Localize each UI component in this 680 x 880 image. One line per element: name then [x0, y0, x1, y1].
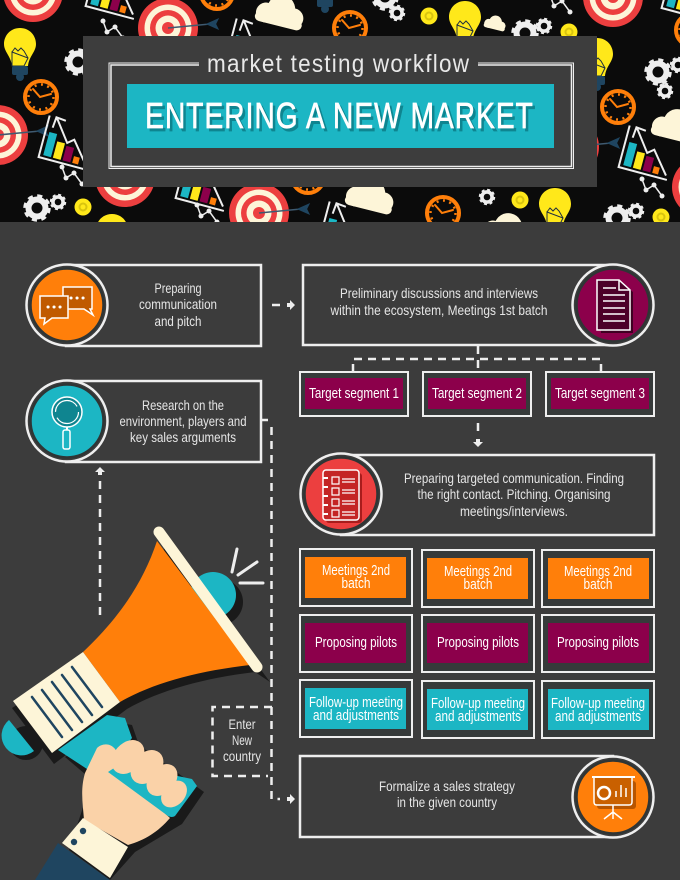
card: pilots column 2: Proposing pilots: [437, 635, 519, 651]
card: meetings column 3: batch: [584, 577, 612, 593]
step: preliminary discussions: [303, 264, 654, 346]
step text: communication: [139, 296, 217, 312]
title panel: [83, 36, 597, 187]
title bar: ENTERING A NEW MARKET: [148, 99, 535, 139]
card: meetings column 2: batch: [464, 577, 492, 593]
box text: Enter: [228, 716, 256, 732]
card: follow-up column 1: [300, 680, 412, 737]
step: preparing targeted communication: [300, 454, 654, 535]
step text: Preparing: [154, 280, 202, 296]
box text: [223, 716, 261, 764]
drop shadow: [9, 541, 270, 880]
target segment 1: Target segment 1: [309, 386, 399, 402]
icon pattern background: [0, 0, 680, 222]
step text: environment, players and: [120, 413, 246, 429]
icon: document: [597, 280, 633, 333]
back bell: [190, 572, 236, 618]
orange horn: [83, 541, 250, 702]
teal handle: [58, 715, 132, 778]
card: meetings column 3: Meetings 2nd: [564, 564, 632, 580]
sound lines: [232, 549, 263, 583]
step text: the right contact. Pitching. Organising: [418, 486, 610, 502]
hand palm and thumb: [82, 744, 170, 845]
card: follow-up column 3: [542, 681, 654, 738]
arrow: to preliminary discussions: [272, 300, 295, 310]
card: meetings column 1: [300, 549, 412, 606]
shirt cuff: [62, 818, 128, 878]
card: follow-up column 1: Follow-up meeting: [309, 695, 403, 711]
step text: meetings/interviews.: [460, 503, 568, 519]
step text: key sales arguments: [130, 429, 236, 445]
step text: [139, 280, 217, 329]
step text: [404, 470, 624, 519]
step text: Research on the: [142, 397, 224, 413]
target segment 2: Target segment 2: [432, 386, 522, 402]
branching connector: [353, 346, 601, 372]
target segment 3: Target segment 3: [555, 386, 645, 402]
card: follow-up column 1: and adjustments: [313, 708, 399, 724]
card: follow-up column 3: and adjustments: [555, 709, 641, 725]
card: pilots column 1: Proposing pilots: [315, 635, 397, 651]
card: pilots column 3: [542, 615, 654, 672]
card: follow-up column 2: Follow-up meeting: [431, 696, 525, 712]
step text: in the given country: [397, 794, 497, 810]
target segment 2: [423, 372, 531, 416]
fingers: [105, 734, 192, 813]
card: follow-up column 2: and adjustments: [435, 709, 521, 725]
rear cap: [2, 720, 34, 755]
subtitle: market testing workflow: [207, 50, 470, 78]
header banner: [0, 0, 680, 222]
card: meetings column 1: Meetings 2nd: [322, 563, 390, 579]
cream rim: [159, 532, 257, 667]
title bar: ENTERING A NEW MARKET: [145, 96, 533, 136]
handle collar: [13, 652, 120, 753]
dashed connector: research to formalize: [262, 420, 295, 804]
step text: [120, 397, 246, 445]
step text: Formalize a sales strategy: [379, 778, 515, 794]
box text: country: [223, 748, 261, 764]
navy sleeve: [35, 843, 110, 880]
teal grip: [108, 764, 197, 817]
card: meetings column 2: Meetings 2nd: [444, 564, 512, 580]
title bar: [127, 84, 554, 148]
step: formalize a sales strategy: [300, 756, 654, 838]
step: preparing communication and pitch: [26, 264, 261, 346]
dashed connector: megaphone to research: [95, 467, 105, 615]
icon: presentation board: [592, 777, 636, 819]
icon: magnifying glass: [52, 397, 82, 449]
icon: chat bubbles: [40, 287, 93, 324]
card: pilots column 2: [422, 615, 534, 672]
icon: checklist: [323, 470, 362, 523]
card: pilots column 3: Proposing pilots: [557, 635, 639, 651]
target segment 3: [546, 372, 654, 416]
step: research on the environment: [26, 380, 261, 462]
step text: [330, 285, 548, 318]
grid: batch meetings, pilots and follow-ups: [300, 549, 654, 738]
step text: Preliminary discussions and interviews: [340, 285, 538, 301]
target segment 1: [300, 372, 408, 416]
card: meetings column 2: [422, 550, 534, 607]
card: meetings column 3: [542, 550, 654, 607]
box text: New: [232, 732, 253, 748]
card: follow-up column 3: Follow-up meeting: [551, 696, 645, 712]
step text: Preparing targeted communication. Finding: [404, 470, 624, 486]
step text: [379, 778, 515, 810]
megaphone and hand illustration: [2, 532, 270, 880]
arrow: down to targeted communication: [473, 423, 483, 447]
card: meetings column 1: batch: [342, 576, 370, 592]
card: pilots column 1: [300, 615, 412, 672]
card: follow-up column 2: [422, 681, 534, 738]
step text: and pitch: [154, 313, 202, 329]
step text: within the ecosystem, Meetings 1st batch: [330, 302, 548, 318]
dashed box: enter new country: [212, 707, 272, 776]
